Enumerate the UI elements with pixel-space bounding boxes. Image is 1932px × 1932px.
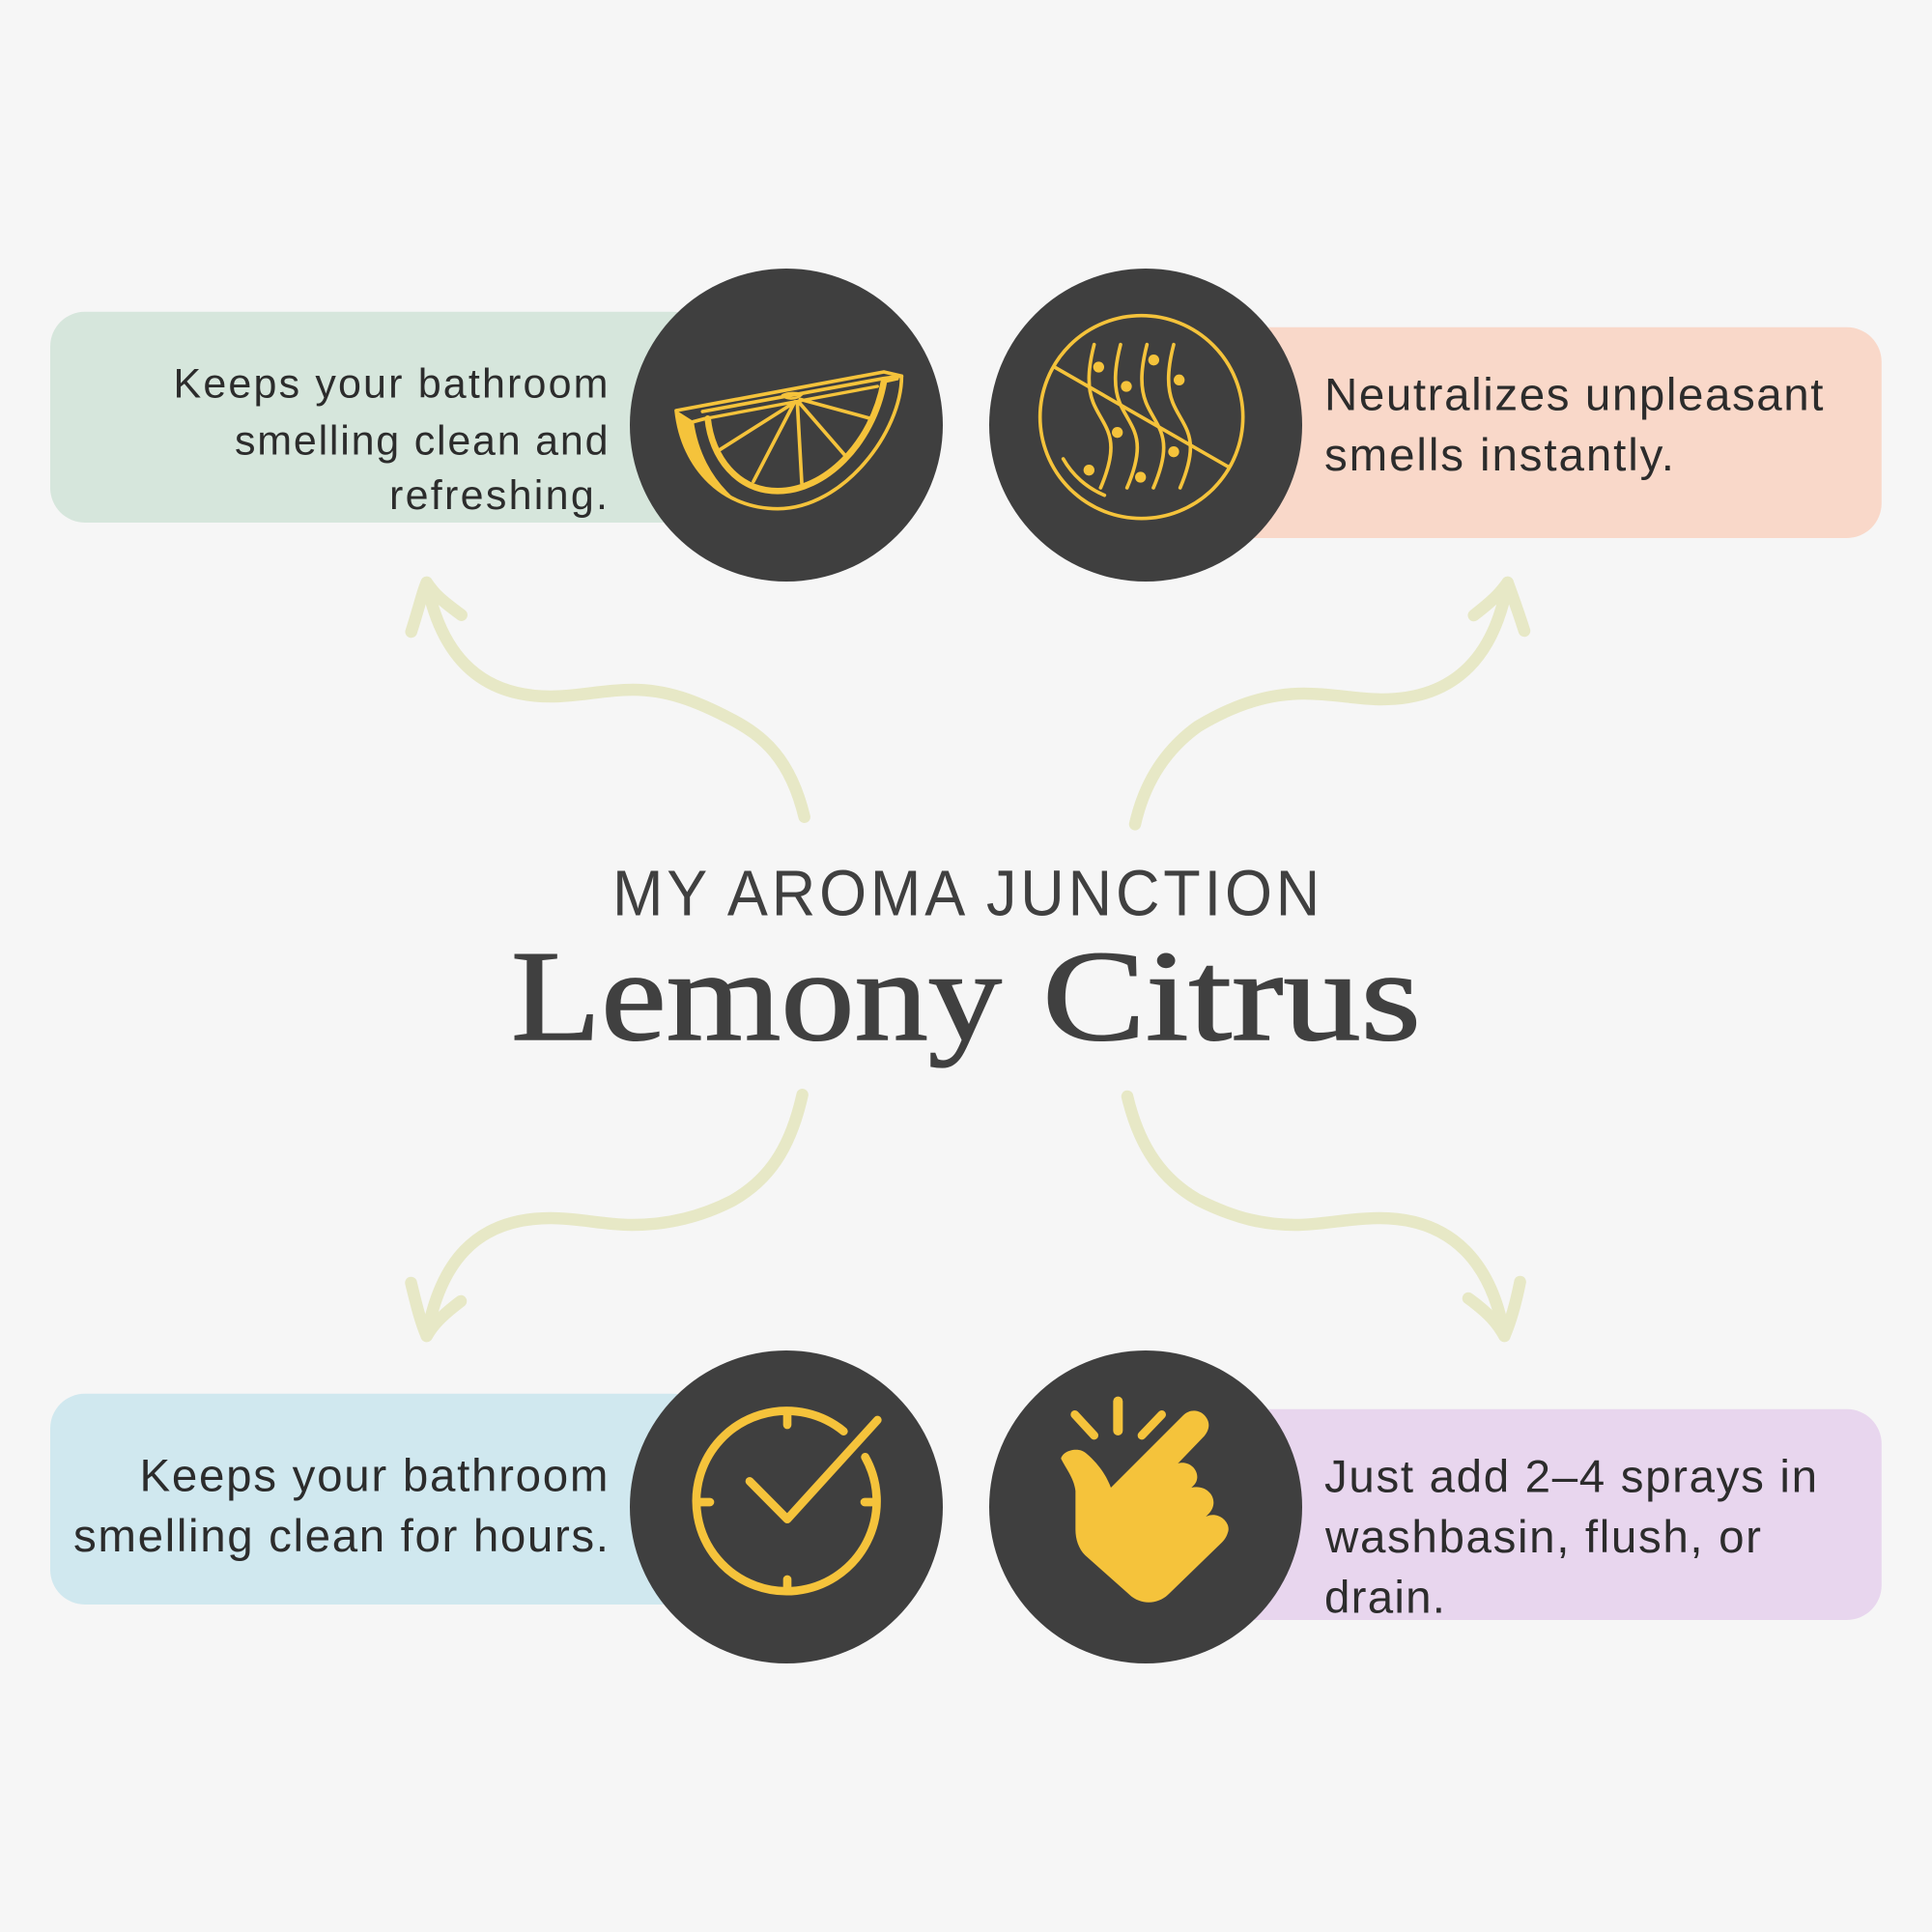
card background purple bbox=[1217, 1409, 1882, 1620]
panel: how to use benefit bbox=[989, 1350, 1882, 1663]
text block: how to use bbox=[1324, 1451, 1817, 1623]
text block: neutralizes smells bbox=[1324, 369, 1824, 481]
arrow: to bottom-left panel bbox=[412, 1094, 803, 1336]
text block: long lasting bbox=[73, 1450, 609, 1562]
card background green bbox=[50, 312, 707, 523]
panel: long lasting benefit bbox=[50, 1350, 943, 1663]
arrow: to bottom-right panel bbox=[1127, 1096, 1520, 1336]
text block: clean and refreshing: refreshing. bbox=[389, 472, 608, 519]
text block: neutralizes smells: Neutralizes unpleasant bbox=[1324, 369, 1824, 420]
icon: finger snap hand bbox=[989, 1350, 1302, 1663]
main title: second word: Citrus bbox=[1042, 924, 1421, 1067]
text block: clean and refreshing bbox=[174, 361, 609, 519]
arrow: to top-right panel bbox=[1135, 582, 1524, 824]
title block bbox=[511, 857, 1421, 1067]
text block: how to use: drain. bbox=[1324, 1573, 1445, 1623]
card background peach bbox=[1217, 327, 1882, 538]
text block: how to use: Just add 2–4 sprays in bbox=[1324, 1451, 1817, 1502]
panel: neutralizes smells benefit bbox=[989, 269, 1882, 582]
text block: long lasting: Keeps your bathroom bbox=[139, 1450, 609, 1501]
text block: how to use: washbasin, flush, or bbox=[1324, 1512, 1761, 1563]
arrow: to top-left panel bbox=[412, 582, 805, 817]
brand subtitle: MY AROMA JUNCTION bbox=[612, 857, 1320, 929]
icon: lemon slice bbox=[630, 269, 943, 582]
card background blue bbox=[50, 1394, 707, 1605]
panel: clean and refreshing benefit bbox=[50, 269, 943, 582]
main title: first word: Lemony bbox=[511, 924, 1002, 1067]
text block: clean and refreshing: smelling clean and bbox=[235, 417, 609, 464]
text block: neutralizes smells: smells instantly. bbox=[1324, 430, 1674, 481]
icon: clock with check mark bbox=[630, 1350, 943, 1663]
text block: long lasting: smelling clean for hours. bbox=[73, 1511, 609, 1562]
icon: no bad smell bbox=[989, 269, 1302, 582]
text block: clean and refreshing: Keeps your bathroom bbox=[174, 361, 609, 408]
